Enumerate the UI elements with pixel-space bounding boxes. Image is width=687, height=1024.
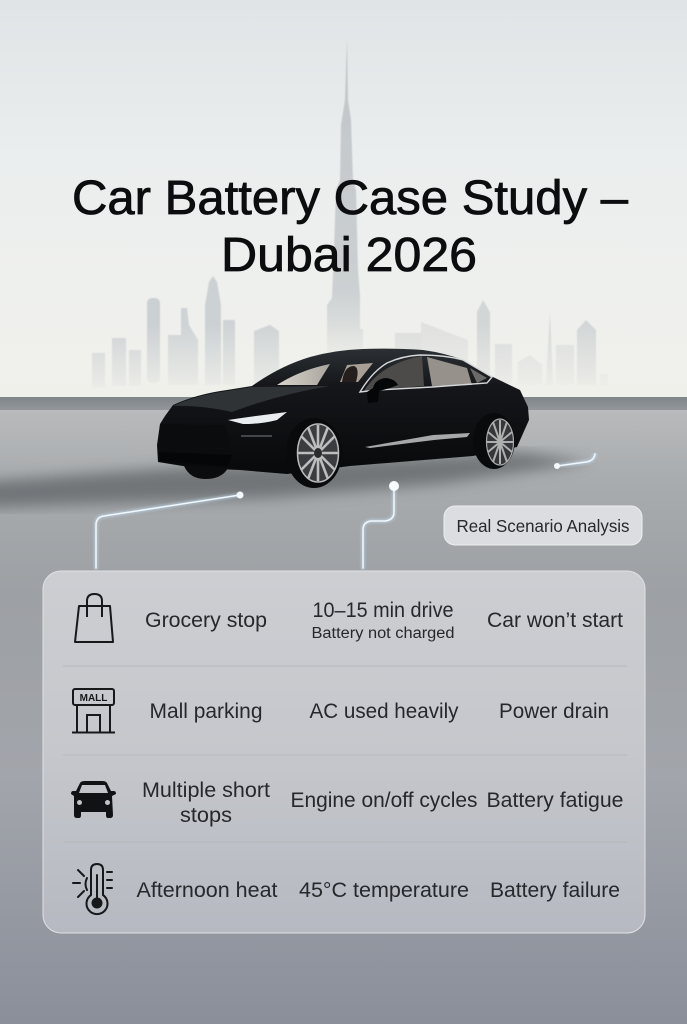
icon: mall storefront (72, 689, 115, 732)
front grille (159, 424, 232, 449)
hood highlight (173, 386, 330, 412)
title: Car Battery Case Study – (72, 172, 628, 225)
label: battery failure: Battery failure (490, 878, 620, 902)
rear quarter window (470, 368, 487, 383)
row: afternoon heat (73, 864, 620, 914)
lower intake (159, 452, 232, 466)
windshield interior (340, 363, 373, 382)
label: multiple short stops (142, 778, 270, 827)
headlight (228, 412, 287, 424)
label: drive duration (312, 599, 454, 642)
car shadow on the ground (0, 452, 590, 508)
background sky (0, 0, 687, 397)
centre connector (363, 481, 399, 568)
icon: mall storefront: MALL (80, 693, 107, 704)
title (72, 172, 628, 282)
far front tyre (184, 466, 228, 479)
badge: real scenario analysis: Real Scenario Analysis (456, 516, 630, 536)
side mirror (367, 378, 398, 403)
interior seat (342, 366, 358, 382)
row: multiple short stops (71, 778, 624, 827)
burj khalifa tower (327, 38, 363, 352)
label: mall parking: Mall parking (150, 699, 262, 723)
horizon band (0, 397, 687, 410)
bumper slit (241, 435, 272, 437)
label: AC used heavily: AC used heavily (310, 699, 459, 723)
row: grocery stop (75, 594, 623, 642)
icon: thermometer with sun (73, 864, 112, 914)
title: Dubai 2026 (221, 229, 477, 282)
label: afternoon heat: Afternoon heat (136, 878, 278, 902)
window chrome trim (360, 355, 492, 392)
icon: shopping bag (75, 594, 113, 642)
icon: car front (71, 781, 116, 818)
label: battery fatigue: Battery fatigue (486, 788, 624, 812)
door sill highlight (365, 433, 470, 448)
left connector (96, 492, 244, 568)
right connector (554, 454, 595, 469)
badge: real scenario analysis (444, 506, 642, 545)
skyline haze (0, 325, 687, 397)
label: multiple short stops: Multiple short (142, 778, 270, 802)
label: grocery stop: Grocery stop (145, 608, 267, 632)
car body (157, 349, 529, 474)
row: mall parking (72, 689, 609, 732)
car (157, 349, 529, 488)
skyline (92, 38, 608, 388)
label: drive duration: 10–15 min drive (312, 599, 454, 622)
rear wheel (473, 413, 515, 469)
label: temperature: 45°C temperature (299, 878, 469, 902)
ground (0, 410, 687, 1024)
rear door window (427, 357, 472, 386)
label: multiple short stops: stops (180, 803, 232, 827)
label: drive duration: Battery not charged (312, 625, 454, 642)
label: car won't start: Car won’t start (487, 608, 623, 632)
label: power drain: Power drain (499, 699, 609, 723)
windshield (277, 364, 330, 385)
panel: scenario table (43, 571, 645, 933)
glowing connector lines (96, 454, 595, 568)
front door window (364, 356, 424, 391)
front wheel (286, 418, 342, 488)
label: engine cycles: Engine on/off cycles (290, 788, 478, 812)
